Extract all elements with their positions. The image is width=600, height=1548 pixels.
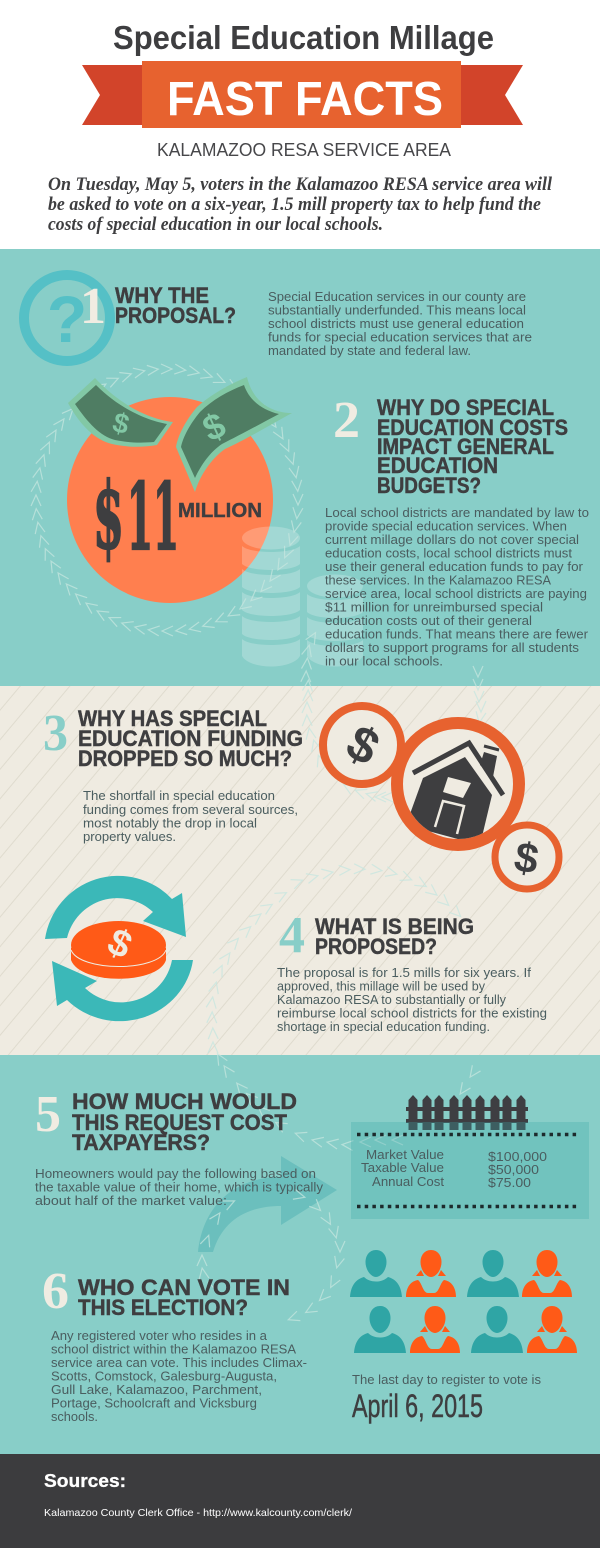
million label: MILLION — [178, 500, 262, 522]
big curved arrow — [198, 1156, 337, 1252]
icon: circular arrows with coin: $ — [101, 921, 138, 968]
heading 2: WHY DO SPECIAL — [377, 395, 554, 420]
number 6: 6 — [42, 1263, 69, 1320]
right dollar circle: $ — [511, 833, 542, 883]
text block 1: Special Education services in our county are — [268, 290, 526, 304]
text block 3 — [83, 789, 298, 844]
intro text: On Tuesday, May 5, voters in the Kalamazoo RESA service area will — [48, 175, 553, 195]
number 2: 2 — [333, 392, 360, 449]
ribbon banner: FAST FACTS — [167, 73, 443, 126]
heading 1 — [115, 283, 236, 328]
panel: section 5 and 6 background — [0, 1055, 600, 1454]
heading 3: EDUCATION FUNDING — [78, 726, 303, 751]
number 1: 1 — [80, 278, 106, 335]
heading 4: PROPOSED? — [315, 934, 437, 959]
value table — [351, 1122, 589, 1219]
text block 4: reimburse local school districts for the existing — [277, 1006, 547, 1020]
heading 4: WHAT IS BEING — [315, 914, 474, 939]
text block 6: schools. — [51, 1410, 98, 1424]
text block 6: school district within the Kalamazoo RESA — [51, 1342, 297, 1356]
text block 6: Scotts, Comstock, Galesburg-Augusta, — [51, 1370, 277, 1384]
icon: circular arrows with coin — [45, 876, 193, 1021]
text block 6: Portage, Schoolcraft and Vicksburg — [51, 1396, 257, 1410]
heading 5: HOW MUCH WOULD — [72, 1089, 297, 1114]
text block 1: school districts must use general education — [268, 317, 524, 331]
text block 3: The shortfall in special education — [83, 789, 275, 803]
text block 5: about half of the market value: — [35, 1194, 227, 1208]
intro text — [48, 175, 553, 235]
heading 2 — [377, 395, 568, 498]
heading 1: PROPOSAL? — [115, 303, 236, 328]
text block 4 — [277, 966, 547, 1034]
icon: fence — [406, 1095, 528, 1130]
text block 4: approved, this millage will be used by — [277, 980, 486, 994]
value table: Taxable Value — [361, 1161, 444, 1175]
text block 2 — [325, 506, 589, 668]
text block 6: Any registered voter who resides in a — [51, 1329, 267, 1343]
sources link text: Kalamazoo County Clerk Office - http://www.kalcounty.com/clerk/ — [44, 1507, 352, 1519]
heading 2: IMPACT GENERAL — [377, 434, 554, 459]
ribbon banner — [82, 61, 523, 128]
text block 5: Homeowners would pay the following based on — [35, 1167, 316, 1181]
panel: $11 million graphic — [68, 377, 292, 571]
panel: section 1 why the proposal — [24, 275, 532, 361]
intro text: costs of special education in our local schools. — [48, 215, 383, 235]
panel: section 3 funding drop — [43, 705, 559, 889]
panel: section 5 cost — [35, 1086, 589, 1219]
registration note: The last day to register to vote is — [352, 1373, 541, 1387]
heading 2: BUDGETS? — [377, 473, 481, 498]
panel: section 4 proposal — [45, 876, 547, 1034]
panel: $11 million graphic: 11 — [127, 463, 179, 571]
icon: left banknote — [68, 378, 173, 447]
text block 2: $11 million for unreimbursed special — [325, 600, 543, 614]
left dollar circle — [323, 706, 401, 784]
text block 2: dollars to support programs for all students — [325, 641, 579, 655]
text block 1 — [268, 290, 532, 358]
heading 6: WHO CAN VOTE IN — [78, 1275, 290, 1300]
panel: section 6 voting — [42, 1250, 577, 1424]
heading 3: DROPPED SO MUCH? — [78, 746, 292, 771]
registration date: April 6, 2015 — [352, 1388, 483, 1424]
panel: $11 million circle — [67, 397, 273, 603]
chevron path: sections 2 to 3 — [301, 630, 486, 802]
sources heading: Sources: — [44, 1471, 126, 1491]
text block 5: the taxable value of their home, which is typically — [35, 1180, 324, 1194]
value table: Annual Cost — [372, 1175, 445, 1189]
text block 2: current millage dollars do not cover special — [325, 533, 579, 547]
value table: $100,000 — [488, 1150, 547, 1164]
subtitle: KALAMAZOO RESA SERVICE AREA — [157, 139, 452, 160]
text block 6: service area can vote. This includes Climax- — [51, 1356, 307, 1370]
text block 5 — [35, 1167, 324, 1208]
white header background — [0, 0, 600, 249]
text block 2: provide special education services. When — [325, 520, 567, 534]
heading 6 — [78, 1275, 290, 1320]
panel: section 1 and 2 background — [0, 249, 600, 686]
value table: Market Value — [366, 1148, 444, 1162]
heading 4 — [315, 914, 474, 959]
heading 5: TAXPAYERS? — [72, 1130, 210, 1155]
text block 3: property values. — [83, 830, 176, 844]
text block 2: education costs out of their general — [325, 614, 532, 628]
icon: question mark — [24, 275, 110, 361]
text block 2: education funds. That means there are fewer — [325, 628, 588, 642]
coin stacks — [242, 526, 363, 666]
icon: right banknote: $ — [196, 404, 231, 449]
heading 3: WHY HAS SPECIAL — [78, 706, 267, 731]
intro text: be asked to vote on a six-year, 1.5 mill property tax to help fund the — [48, 195, 541, 215]
icon: voters — [350, 1250, 577, 1353]
number 3: 3 — [43, 705, 68, 762]
text block 4: The proposal is for 1.5 mills for six years. If — [277, 966, 532, 980]
value table: $50,000 — [488, 1163, 539, 1177]
text block 4: shortage in special education funding. — [277, 1020, 490, 1034]
text block 2: these services. In the Kalamazoo RESA — [325, 574, 552, 588]
heading 5 — [72, 1089, 297, 1155]
chevron path: section 5 to 6 — [197, 1190, 345, 1324]
heading 1: WHY THE — [115, 283, 209, 308]
heading 3 — [78, 706, 303, 771]
text block 1: mandated by state and federal law. — [268, 344, 471, 358]
value table: $75.00 — [488, 1176, 531, 1190]
icon: question mark: ? — [47, 282, 87, 356]
right dollar circle — [495, 825, 559, 889]
house circle — [397, 723, 519, 845]
text block 2: education costs, local school districts must — [325, 546, 573, 560]
icon: house and dollars — [323, 706, 559, 889]
left dollar circle: $ — [338, 714, 389, 776]
text block 1: funds for special education services that are — [268, 330, 532, 344]
number 4: 4 — [279, 907, 305, 964]
chevron path: section 5 upper — [213, 1051, 481, 1151]
heading 2: EDUCATION COSTS — [377, 415, 568, 440]
text block 2: Local school districts are mandated by law to — [325, 506, 589, 520]
heading 6: THIS ELECTION? — [78, 1295, 248, 1320]
panel: section 3 and 4 background — [0, 686, 600, 1055]
text block 6 — [51, 1329, 307, 1424]
panel: section 2 special education costs — [325, 392, 589, 668]
text block 3: funding comes from several sources, — [83, 803, 298, 817]
text block 1: substantially underfunded. This means local — [268, 304, 526, 318]
chevron ring around $11 million — [31, 364, 303, 636]
icon: right banknote — [176, 377, 292, 492]
text block 4: Kalamazoo RESA to substantially or fully — [277, 993, 507, 1007]
number 5: 5 — [35, 1086, 61, 1143]
text block 3: most notably the drop in local — [83, 816, 257, 830]
text block 2: in our local schools. — [325, 654, 443, 668]
chevron path: section 4 curve — [206, 864, 464, 1053]
$11 figure: $ — [93, 462, 124, 570]
text block 2: use their general education funds to pay for — [325, 560, 583, 574]
title: Special Education Millage — [113, 19, 494, 56]
panel: sources background — [0, 1454, 600, 1548]
text block 6: Gull Lake, Kalamazoo, Parchment, — [51, 1383, 262, 1397]
heading 5: THIS REQUEST COST — [72, 1110, 288, 1135]
text block 2: service area, local school districts are paying — [325, 587, 587, 601]
icon: left banknote: $ — [109, 406, 133, 440]
heading 2: EDUCATION — [377, 453, 498, 478]
